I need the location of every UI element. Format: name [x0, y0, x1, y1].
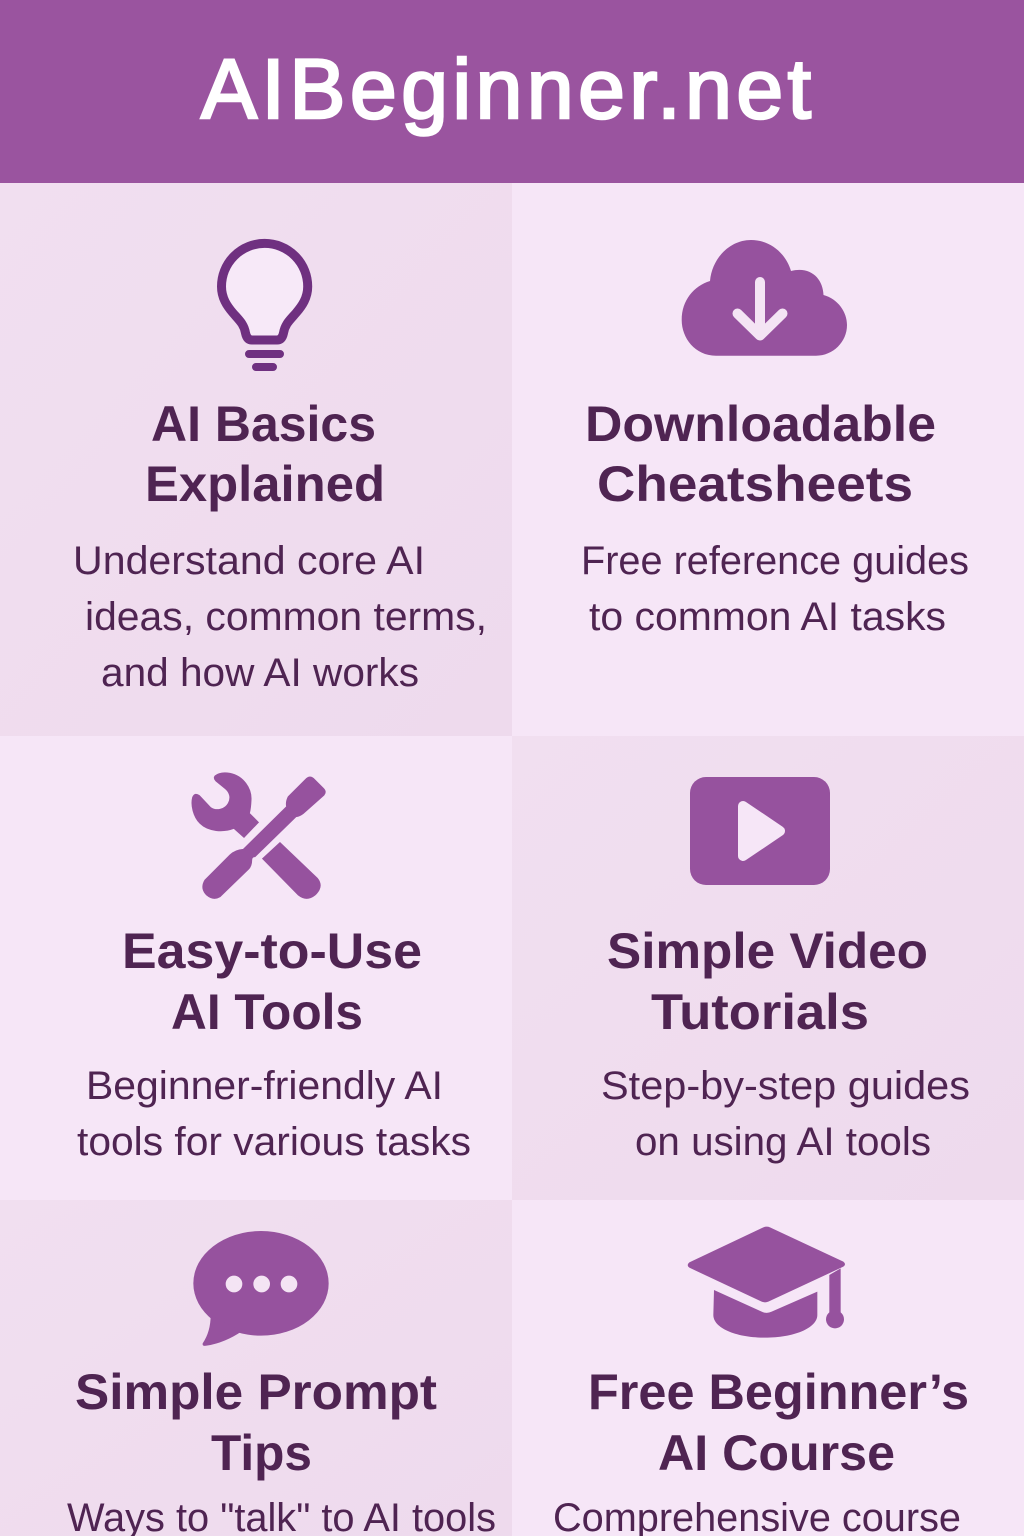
icon: video play button [690, 777, 830, 885]
header banner [0, 0, 1024, 183]
icon: cloud download [682, 240, 847, 356]
description: Step-by-step guides [601, 1064, 970, 1108]
heading: AI Course [658, 1425, 895, 1481]
icon: wrench and screwdriver [192, 773, 325, 898]
description [77, 1064, 471, 1164]
icon: speech bubble [193, 1231, 329, 1346]
icon: light bulb [222, 243, 308, 367]
description [601, 1064, 970, 1164]
description: tools for various tasks [77, 1120, 471, 1164]
heading: Cheatsheets [597, 456, 913, 512]
heading: Simple Video [607, 923, 928, 979]
description [581, 539, 969, 639]
heading: Free Beginner’s [588, 1364, 969, 1420]
description [73, 539, 487, 695]
panel: Simple Prompt Tips [0, 1200, 512, 1536]
description: ideas, common terms, [85, 595, 487, 639]
description: to common AI tasks [589, 595, 946, 639]
heading: Tips [211, 1425, 312, 1481]
panel: Free Beginner's AI Course [512, 1200, 1024, 1536]
description: Beginner-friendly AI [86, 1064, 443, 1108]
description: and how AI works [101, 651, 419, 695]
panel: Downloadable Cheatsheets [512, 183, 1024, 736]
description: on using AI tools [635, 1120, 931, 1164]
heading: AI Tools [171, 984, 363, 1040]
heading: AI Basics [151, 396, 376, 452]
heading: Easy-to-Use [122, 923, 422, 979]
panel: Easy-to-Use AI Tools [0, 736, 512, 1200]
heading [585, 396, 936, 512]
heading [145, 396, 385, 512]
description: Free reference guides [581, 539, 969, 583]
heading: Explained [145, 456, 385, 512]
heading [607, 923, 928, 1040]
heading [588, 1364, 969, 1481]
icon: graduation cap [688, 1227, 845, 1338]
heading [122, 923, 422, 1040]
heading [75, 1364, 437, 1481]
heading: Simple Prompt [75, 1364, 437, 1420]
panel: Simple Video Tutorials [512, 736, 1024, 1200]
title: AIBeginner.net [201, 42, 811, 136]
description: Understand core AI [73, 539, 425, 583]
heading: Tutorials [651, 984, 869, 1040]
heading: Downloadable [585, 396, 936, 452]
panel: AI Basics Explained [0, 183, 512, 736]
